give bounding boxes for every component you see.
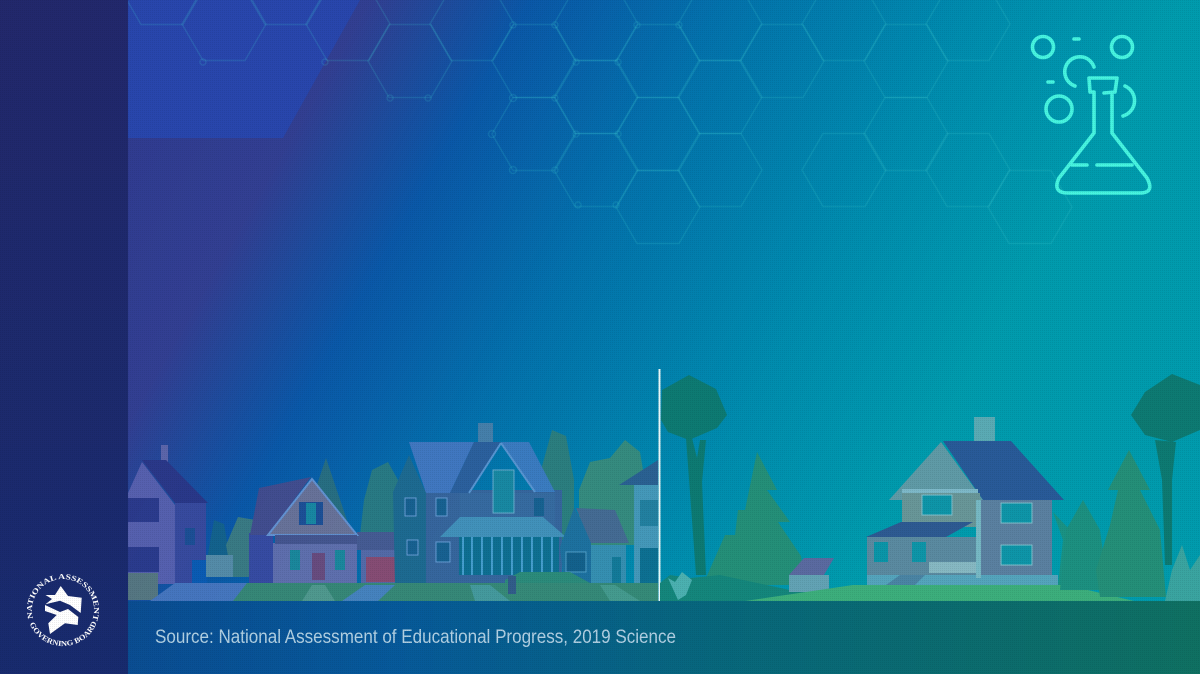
source band bbox=[128, 601, 1200, 674]
background trees, suburb bbox=[205, 430, 655, 577]
suburb lawns and walkways bbox=[150, 572, 658, 601]
house 1 bbox=[128, 445, 208, 600]
house 2 with garage bbox=[249, 477, 405, 583]
left rural tree bbox=[661, 375, 727, 575]
logo star bbox=[45, 586, 82, 634]
right rural tree bbox=[1131, 374, 1200, 565]
right pale bush and hillside bbox=[1165, 545, 1200, 601]
right rural conifers bbox=[1053, 450, 1166, 597]
house 3 large with porch bbox=[393, 423, 566, 583]
left-right divider line bbox=[658, 369, 660, 601]
shed bbox=[206, 555, 233, 577]
rural low hill bbox=[660, 575, 850, 601]
house 4 bbox=[560, 508, 629, 583]
background gradient bbox=[128, 0, 1200, 601]
hexagon molecule pattern bbox=[120, 0, 1072, 244]
small shed bbox=[789, 558, 834, 592]
house 5 cut by divider bbox=[619, 460, 658, 583]
blue angled panel bbox=[128, 0, 360, 138]
pale bush bbox=[668, 572, 692, 600]
rural green hill bbox=[745, 585, 1134, 601]
logo ring text: NATIONAL ASSESSMENT bbox=[27, 574, 99, 622]
logo: National Assessment Governing Board bbox=[27, 574, 99, 646]
left conifer bbox=[706, 452, 806, 585]
illustration: suburban houses bbox=[128, 423, 658, 601]
logo ring text bbox=[27, 574, 99, 646]
icon: science flask with bubbles bbox=[1032, 36, 1150, 193]
left sidebar bbox=[0, 0, 128, 674]
logo ring text: GOVERNING BOARD bbox=[30, 622, 96, 646]
source note: Source: National Assessment of Educational Progress, 2019 Science bbox=[155, 627, 676, 648]
rural farmhouse bbox=[866, 417, 1064, 585]
